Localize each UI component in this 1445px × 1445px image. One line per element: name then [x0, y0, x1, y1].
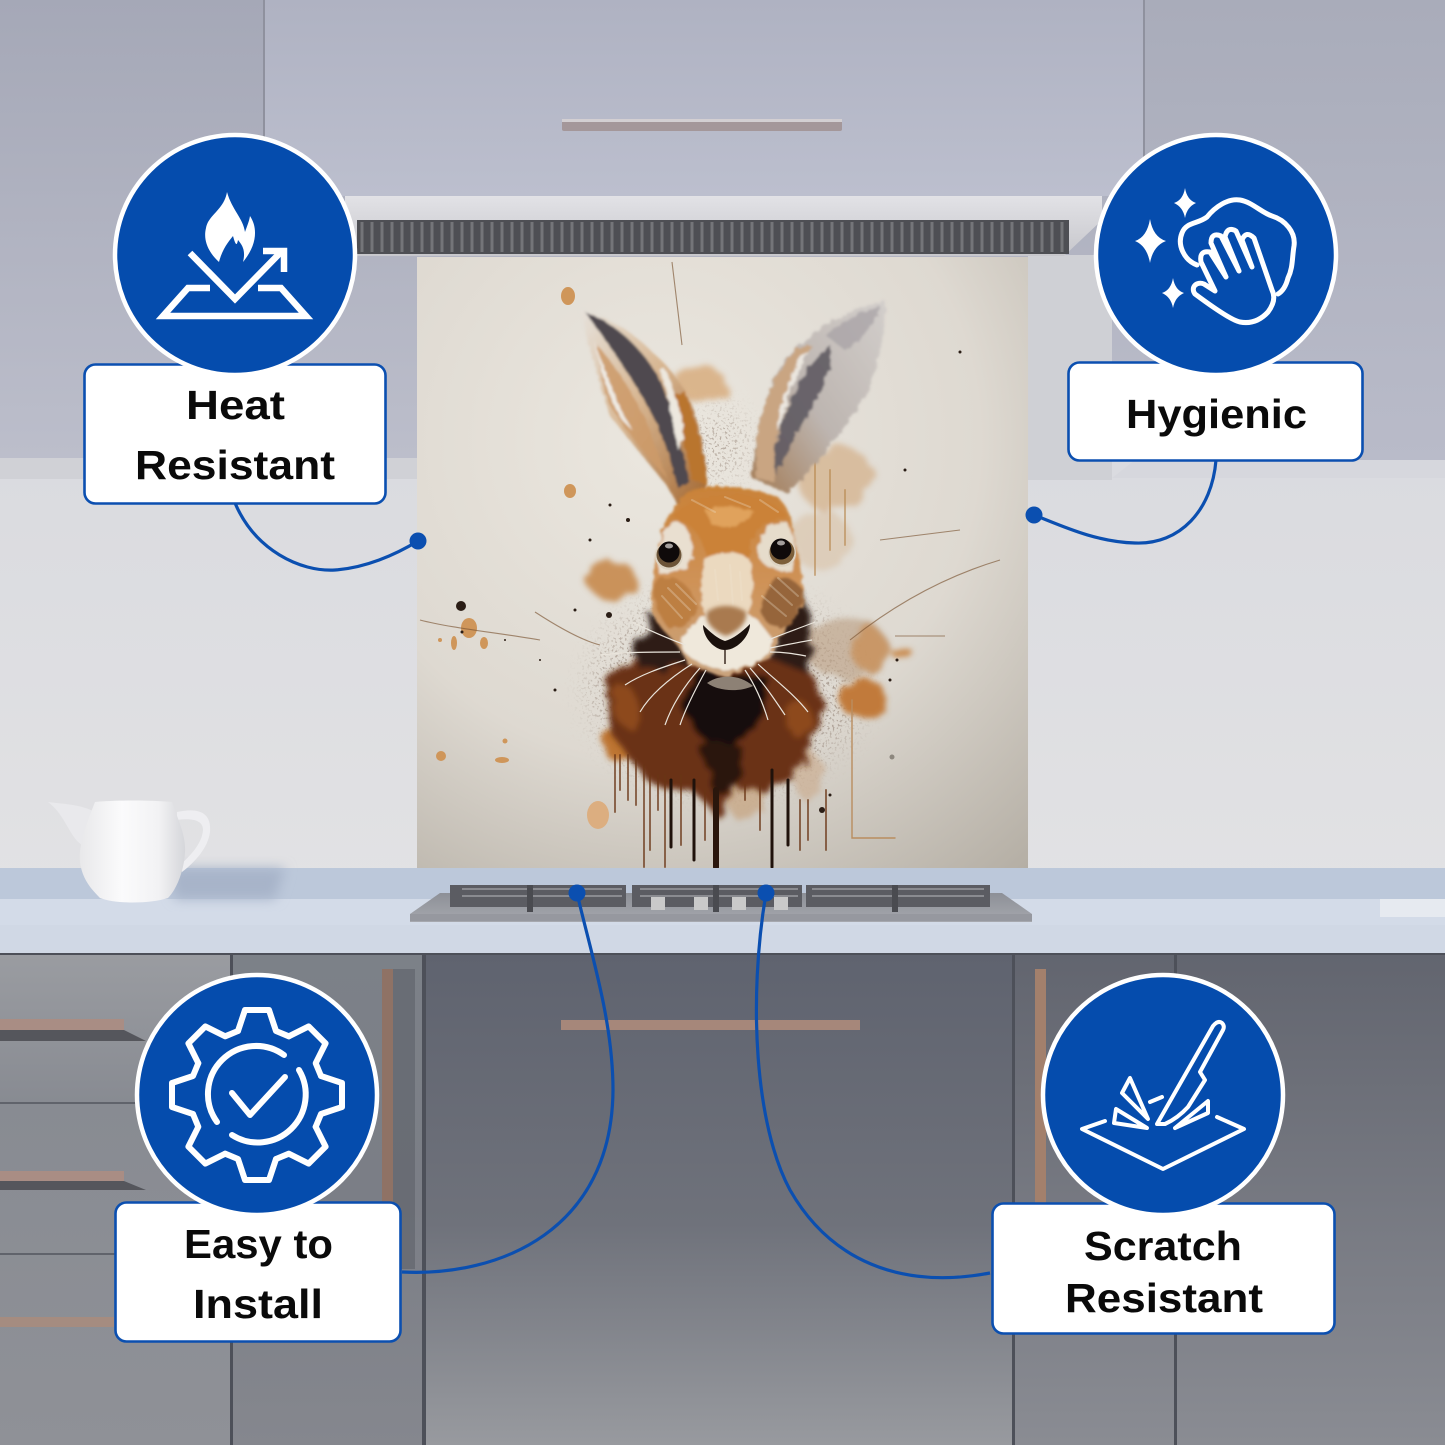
speckled paint grain — [590, 410, 860, 790]
cabinet handle — [562, 119, 842, 131]
callout: hygienic: Hygienic — [1126, 391, 1307, 437]
small paint spots — [436, 287, 609, 829]
paint drips — [615, 460, 895, 867]
thin splatter lines — [420, 262, 1000, 645]
icon: hand wiping with sparkles — [1135, 188, 1294, 323]
connector: hygienic — [1026, 460, 1216, 543]
dark paint splash under face — [604, 590, 822, 820]
right ear — [752, 301, 885, 494]
callout: heat resistant: Resistant — [135, 442, 335, 488]
gas hob — [410, 885, 1032, 922]
callout: scratch resistant — [992, 975, 1334, 1334]
fur strokes — [662, 497, 798, 618]
teapot — [48, 800, 210, 902]
callout: hygienic — [1068, 135, 1362, 460]
connector: easy to install — [402, 884, 613, 1272]
callout: easy to install — [116, 975, 400, 1342]
callout: heat resistant: Heat — [186, 382, 285, 428]
hare whiskers — [600, 622, 815, 725]
lower cabinets — [0, 953, 1445, 1445]
pale tan stains — [672, 368, 888, 822]
cooker hood — [345, 196, 1102, 256]
callout: easy to install: Install — [193, 1281, 323, 1327]
icon: flame on surface — [163, 192, 306, 316]
drawer and door handles — [0, 969, 1046, 1327]
hare eyes — [655, 538, 796, 570]
splatter specks — [456, 350, 962, 813]
icon: knife scratching surface — [1082, 1022, 1244, 1169]
callout: scratch resistant: Resistant — [1065, 1275, 1263, 1321]
worktop — [0, 868, 1445, 953]
callout: scratch resistant: Scratch — [1084, 1223, 1242, 1269]
left ear — [580, 310, 707, 515]
callout: easy to install: Easy to — [184, 1221, 333, 1267]
connector: heat resistant — [235, 503, 426, 570]
orange splashes — [588, 560, 911, 761]
kitchen wall — [0, 0, 1445, 900]
panel: hare artwork splashback — [417, 257, 1028, 868]
hare nose and mouth — [703, 606, 753, 690]
connector: scratch resistant — [756, 884, 990, 1278]
icon: gear with check mark — [172, 1010, 342, 1180]
callout: heat resistant — [84, 135, 386, 504]
hare head — [652, 486, 804, 678]
upper cabinets — [0, 0, 1445, 480]
